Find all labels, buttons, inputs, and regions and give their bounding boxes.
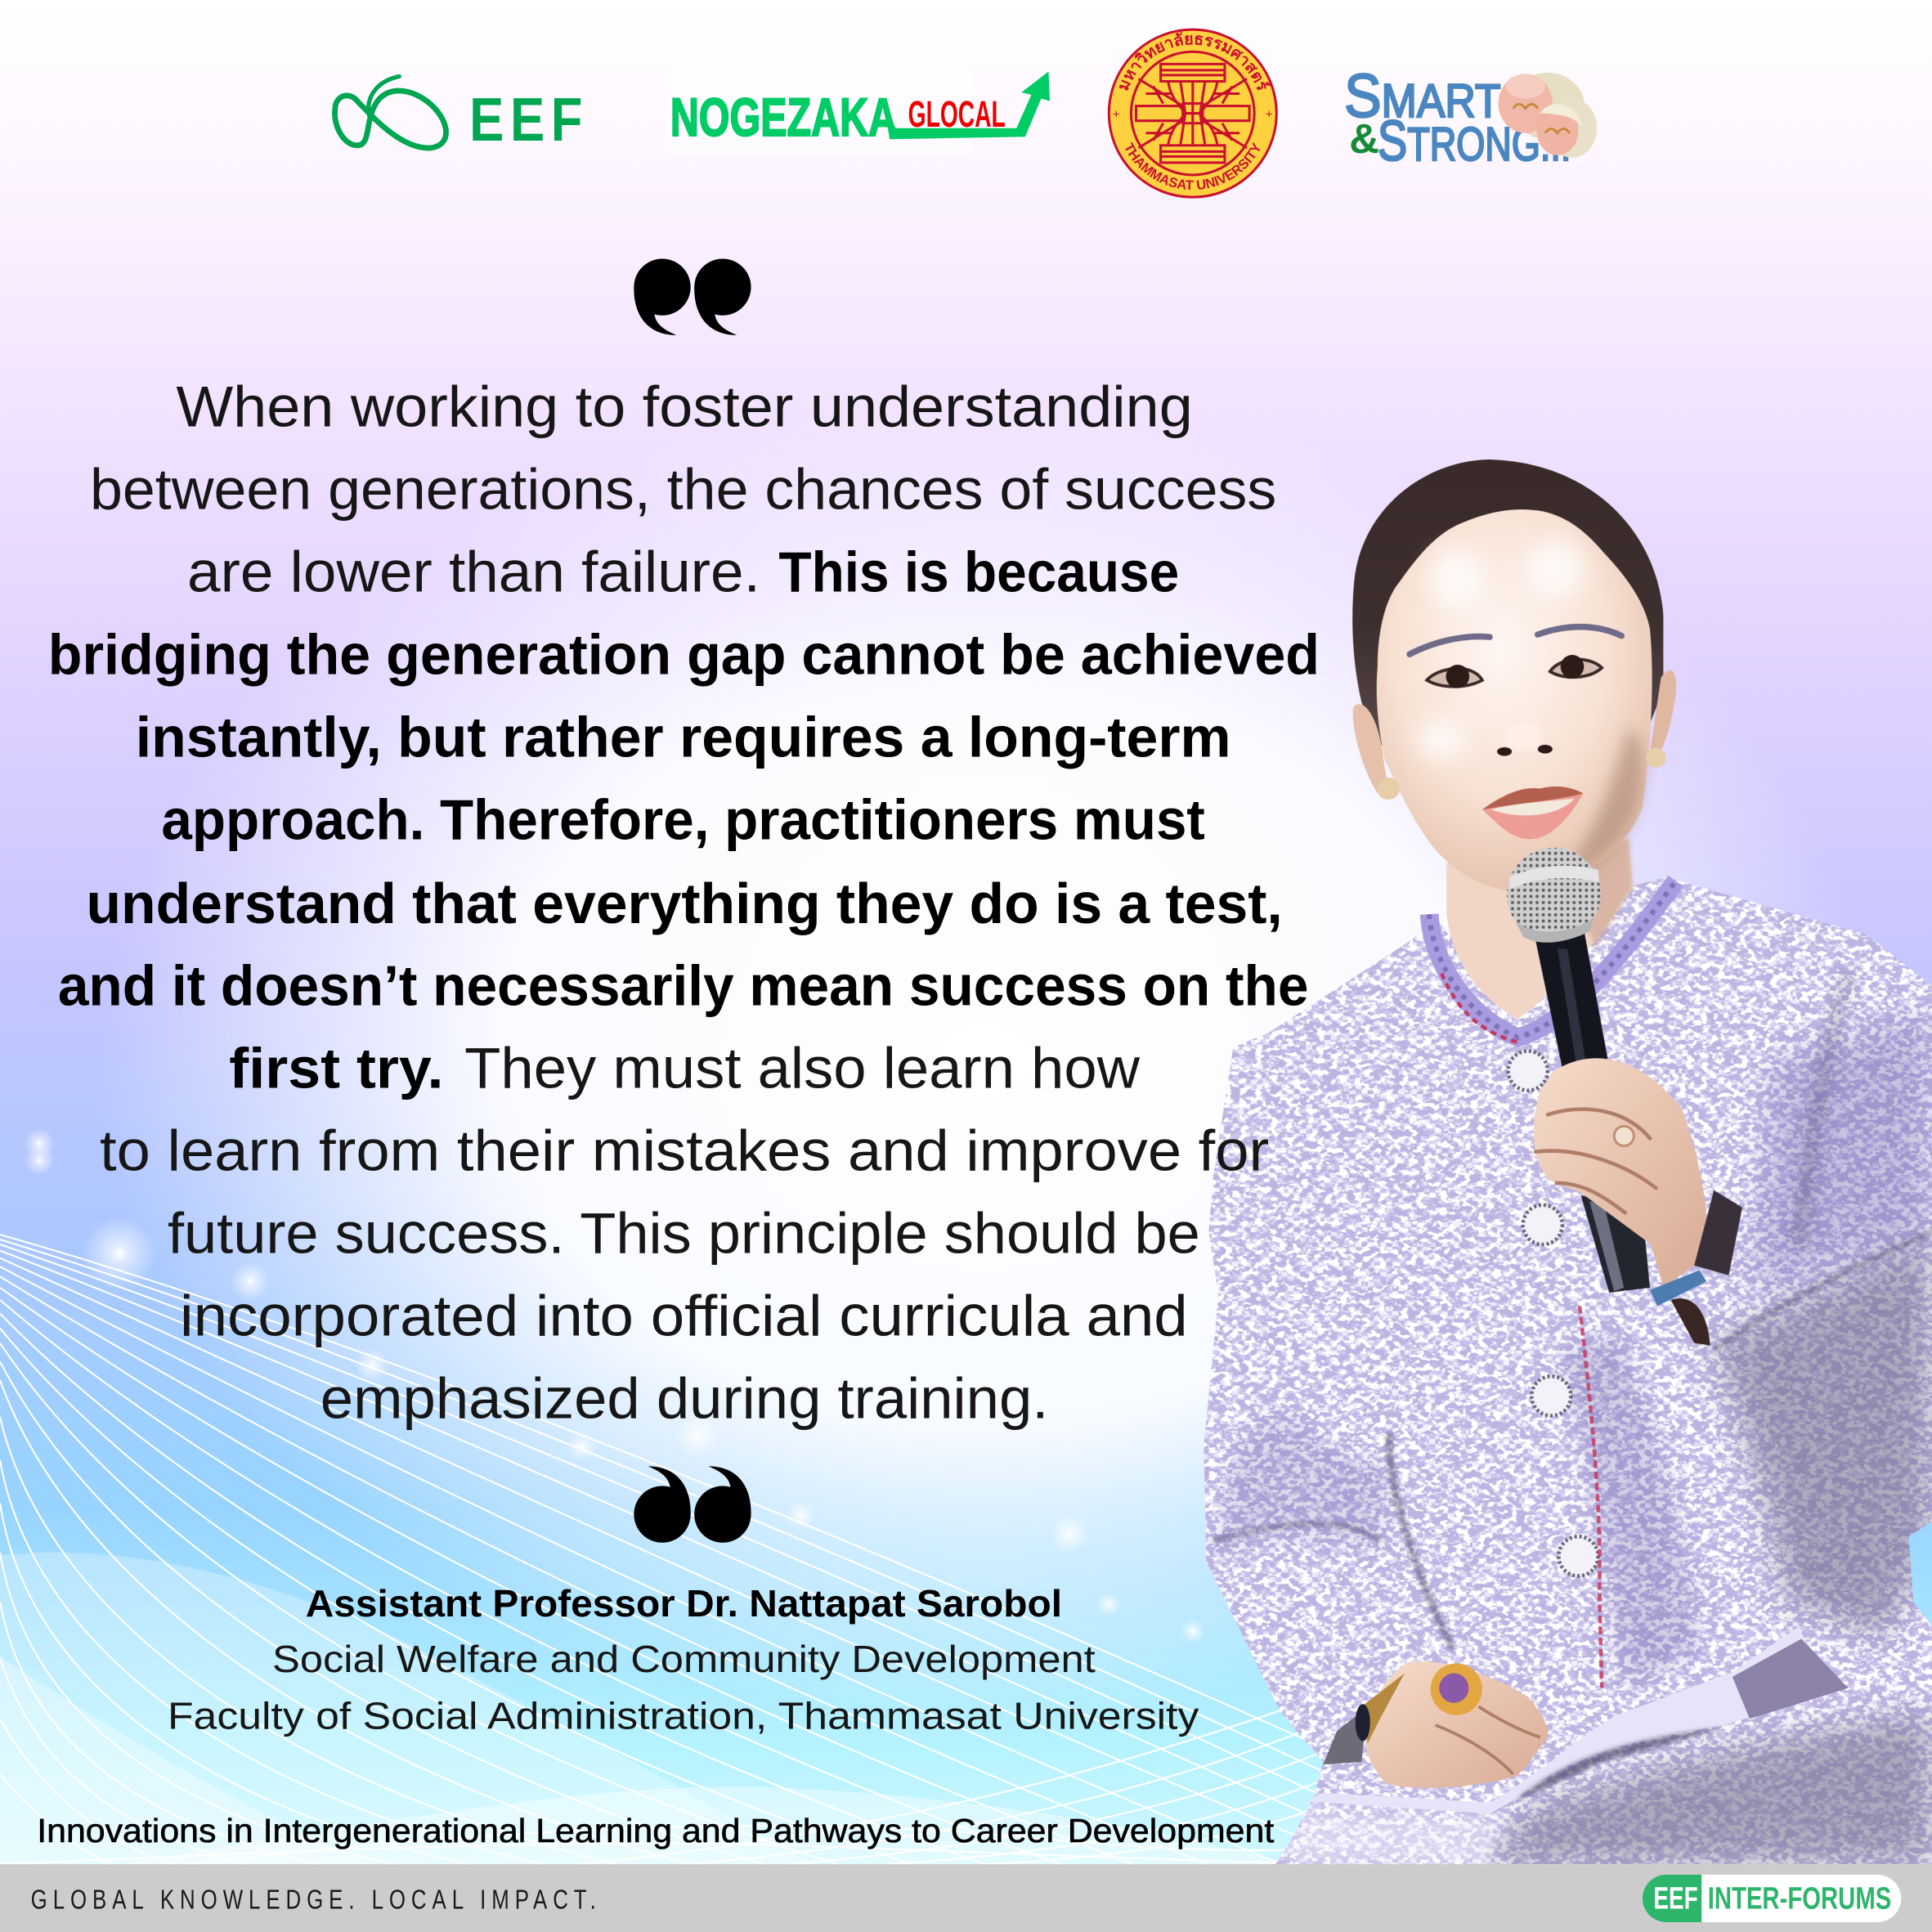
forehead highlight <box>1417 540 1585 759</box>
logo: Smart & Strong <box>1344 61 1597 173</box>
logo: Thammasat University seal: + <box>1113 108 1120 122</box>
icon: grandparents <box>1499 73 1597 158</box>
quote text: They must also learn how <box>464 1037 1141 1101</box>
face <box>1377 509 1652 891</box>
logo: Nogezaka Glocal <box>666 68 1050 154</box>
quote text: This is because <box>778 540 1179 603</box>
jacket shading <box>1213 1011 1932 1864</box>
nose <box>1497 722 1553 756</box>
right hand <box>1534 1058 1707 1288</box>
eyes <box>1427 655 1602 688</box>
logo: Smart & Strong: STRONG... <box>1378 109 1571 173</box>
amethyst ring <box>1431 1663 1482 1715</box>
quote text: first try. <box>229 1037 444 1100</box>
quote text: future success. This principle should be <box>168 1202 1200 1266</box>
left hand <box>1365 1661 1549 1788</box>
logo: EEF: EEF <box>469 85 589 154</box>
photo: speaker <box>1183 459 1932 1873</box>
quote text: are lower than failure. <box>187 540 760 604</box>
closing quote mark <box>634 1466 751 1543</box>
event title: Innovations in Intergenerational Learning and Pathways to Career Development <box>37 1812 1274 1849</box>
bokeh lights <box>25 1128 1205 1643</box>
finger shading <box>1534 1109 1657 1213</box>
finger lines <box>1436 1706 1540 1774</box>
collar trim <box>1429 881 1676 1038</box>
quote text: approach. Therefore, practitioners must <box>161 787 1205 851</box>
watch <box>1650 1190 1742 1346</box>
quote text: emphasized during training. <box>321 1367 1048 1432</box>
quote text: When working to foster understanding <box>177 374 1193 439</box>
eyebrows <box>1410 627 1621 654</box>
opening quote mark <box>634 258 751 335</box>
ring on mic hand <box>1614 1126 1634 1146</box>
microphone <box>1507 848 1650 1293</box>
logo: Thammasat University seal: + <box>1266 108 1273 122</box>
logo: Nogezaka Glocal: GLOCAL <box>908 93 1006 135</box>
earrings <box>1378 748 1665 800</box>
quote text: to learn from their mistakes and improve for <box>100 1119 1269 1184</box>
quote text: and it doesn’t necessarily mean success on the <box>58 954 1308 1018</box>
quote text: between generations, the chances of success <box>90 457 1276 522</box>
logo: Smart & Strong: & <box>1349 115 1379 162</box>
footer slogan: GLOBAL KNOWLEDGE. LOCAL IMPACT. <box>31 1885 596 1915</box>
neck <box>1446 838 1633 1019</box>
hair back <box>1352 459 1663 746</box>
quote text: understand that everything they do is a test, <box>86 872 1283 935</box>
quote text: incorporated into official curricula and <box>180 1284 1188 1349</box>
jacket <box>1183 863 1932 1873</box>
logo: EEF <box>334 76 589 154</box>
logo: EEF Inter-Forums pill: EEF <box>1653 1880 1698 1915</box>
background waves and lines <box>0 1235 1356 1864</box>
logo: Smart & Strong: SMART <box>1344 61 1501 130</box>
quote text: instantly, but rather requires a long-term <box>136 705 1231 769</box>
attribution <box>168 1582 1199 1737</box>
ears <box>1353 704 1387 799</box>
attribution: Assistant Professor Dr. Nattapat Sarobol <box>306 1582 1062 1625</box>
logo: Thammasat University seal: มหาวิทยาลัยธรรมศาสตร์ <box>1118 31 1271 91</box>
sleeve folds <box>1213 974 1932 1646</box>
cuff and bracelet <box>1324 1674 1405 1764</box>
logo: Nogezaka Glocal: NOGEZAKA <box>670 87 897 148</box>
logo: Thammasat University seal: THAMMASAT UNIVERSITY <box>1125 142 1261 190</box>
face shadow <box>1546 727 1643 887</box>
footer bar <box>0 1864 1932 1932</box>
logo: Thammasat University seal <box>1107 28 1278 199</box>
paper <box>1306 1626 1849 1813</box>
mouth <box>1482 787 1584 839</box>
buttons <box>1508 1051 1598 1576</box>
quote text: bridging the generation gap cannot be achieved <box>48 622 1320 686</box>
red trim placket <box>1580 1306 1602 1688</box>
quote text <box>48 374 1320 1432</box>
attribution: Faculty of Social Administration, Thammasat University <box>168 1694 1199 1737</box>
logo: EEF Inter-Forums pill <box>1643 1875 1901 1922</box>
attribution: Social Welfare and Community Development <box>272 1638 1096 1680</box>
